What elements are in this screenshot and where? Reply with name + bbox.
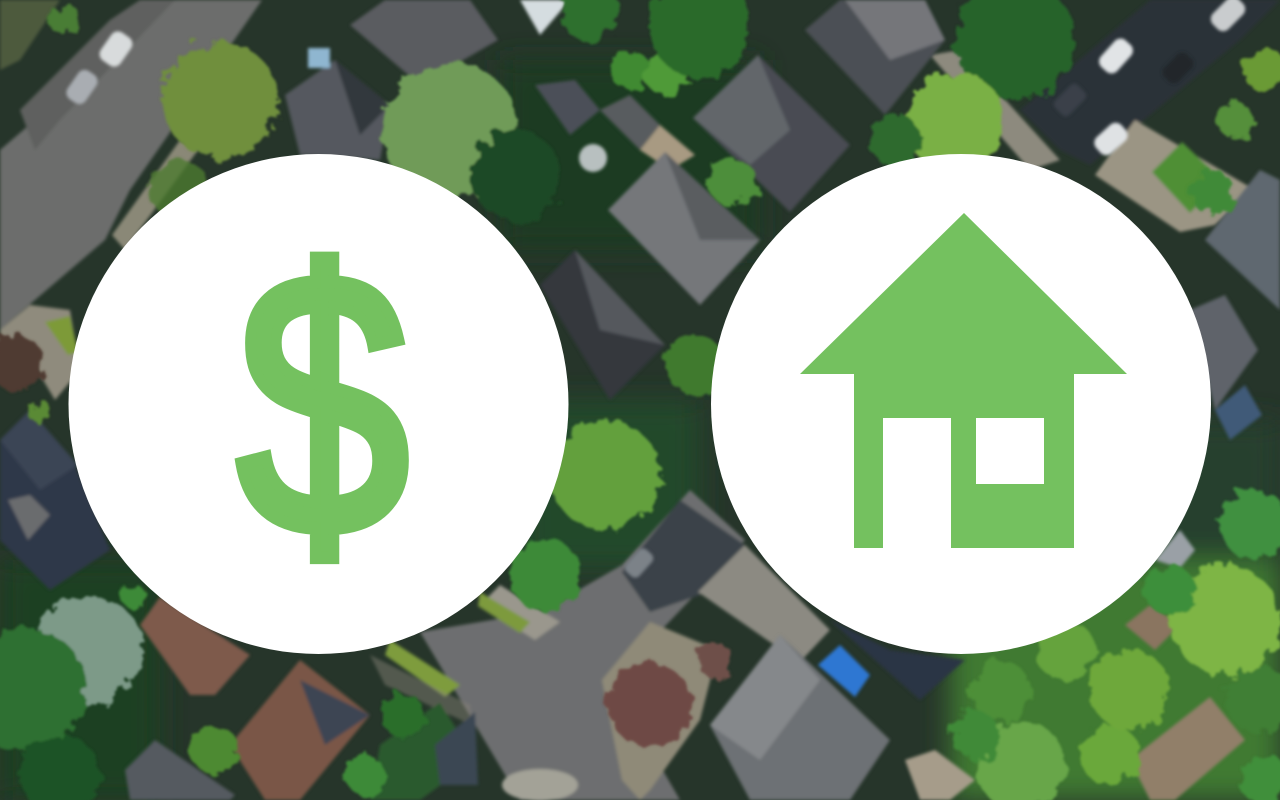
- panel: dollar circle: [68, 154, 568, 654]
- parked cars: [63, 0, 1249, 580]
- icon: house: [800, 213, 1127, 548]
- icon: dollar sign: $: [238, 198, 408, 611]
- panel: house circle: [711, 154, 1211, 654]
